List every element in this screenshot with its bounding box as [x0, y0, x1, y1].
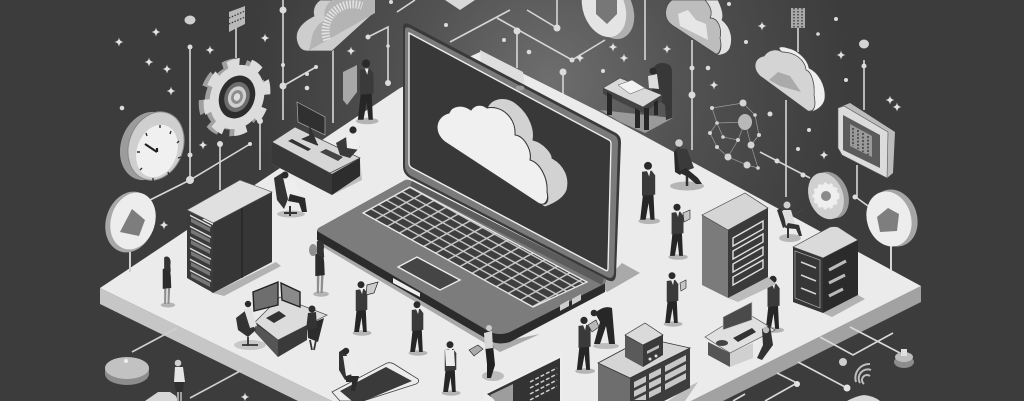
person: seated left at center desk	[236, 301, 258, 346]
person: man front center	[409, 301, 428, 356]
server: bottom cabinet	[598, 323, 698, 401]
desk: center workstation	[234, 282, 327, 357]
icon: small gear dial right	[802, 167, 855, 224]
person: seated on chair left	[274, 172, 307, 218]
cloud: people cloud right	[755, 47, 825, 112]
platform	[100, 52, 921, 401]
laptop lid	[403, 23, 621, 281]
person: man with tablet front	[353, 281, 378, 336]
icon: top box	[445, 0, 475, 10]
trackpad	[398, 257, 460, 290]
icon: clock	[111, 104, 193, 188]
laptop	[317, 23, 640, 352]
person: seated on chair right back	[670, 139, 704, 190]
server: small box on cabinet	[625, 323, 663, 367]
icon: top cap right	[859, 40, 869, 48]
person: man white shirt	[442, 341, 460, 396]
bottom left network	[105, 328, 250, 401]
icon: wifi	[855, 364, 871, 384]
sparkle stars	[114, 22, 902, 230]
icon: pentagon badge left	[98, 185, 163, 272]
person: bending man	[588, 307, 619, 349]
icon: dome	[847, 395, 880, 401]
icon: pentagon badge right	[859, 183, 925, 270]
server: right glossy rack	[793, 226, 865, 317]
server: left rack	[187, 180, 281, 296]
server: middle rack	[702, 193, 776, 302]
chart: network blob	[708, 100, 761, 170]
tablet with seated person	[332, 348, 419, 401]
person: seated right at center desk	[306, 306, 324, 350]
person: standing with sign	[343, 59, 378, 124]
person: woman lower left	[174, 360, 185, 401]
cloud: chart cloud top right	[666, 0, 731, 55]
icon: small top cap	[184, 16, 196, 24]
icon: disk	[105, 357, 149, 385]
icon: gear	[194, 54, 275, 141]
laptop base	[317, 180, 606, 344]
desk: left workstation	[272, 102, 362, 195]
icon: tower data block left	[229, 6, 245, 32]
person: man facing bending man	[575, 317, 595, 374]
wall screen bottom center	[484, 354, 562, 401]
icon: bottom left device	[145, 392, 178, 401]
person: woman left edge	[161, 257, 175, 307]
person: man with tablet top	[668, 204, 690, 260]
person: walking with tablet	[469, 325, 504, 381]
keyboard	[363, 187, 587, 307]
icon: signal tower right	[791, 8, 805, 28]
laptop shadow	[318, 236, 640, 352]
laptop screen cloud	[437, 99, 568, 207]
background network lines	[130, 0, 868, 270]
person: woman with tablet	[309, 240, 329, 297]
desk: right workstation	[705, 302, 775, 367]
bottom right network	[733, 327, 914, 401]
person: seated with tablet near right server	[777, 202, 803, 242]
icon: button	[894, 349, 914, 368]
cloud: shield cloud top	[574, 0, 642, 45]
person: man with tablet mid	[664, 272, 686, 327]
desk: top right	[600, 63, 673, 133]
laptop front notch	[393, 278, 420, 297]
person: man at right desk	[764, 276, 784, 333]
cloud: dashboard cloud top left	[296, 0, 375, 51]
people: standing figures	[161, 162, 784, 396]
network nodes	[120, 0, 866, 200]
laptop ports	[560, 294, 581, 311]
person: man behind chair	[638, 162, 660, 224]
icon: monitor panel right	[838, 103, 895, 178]
